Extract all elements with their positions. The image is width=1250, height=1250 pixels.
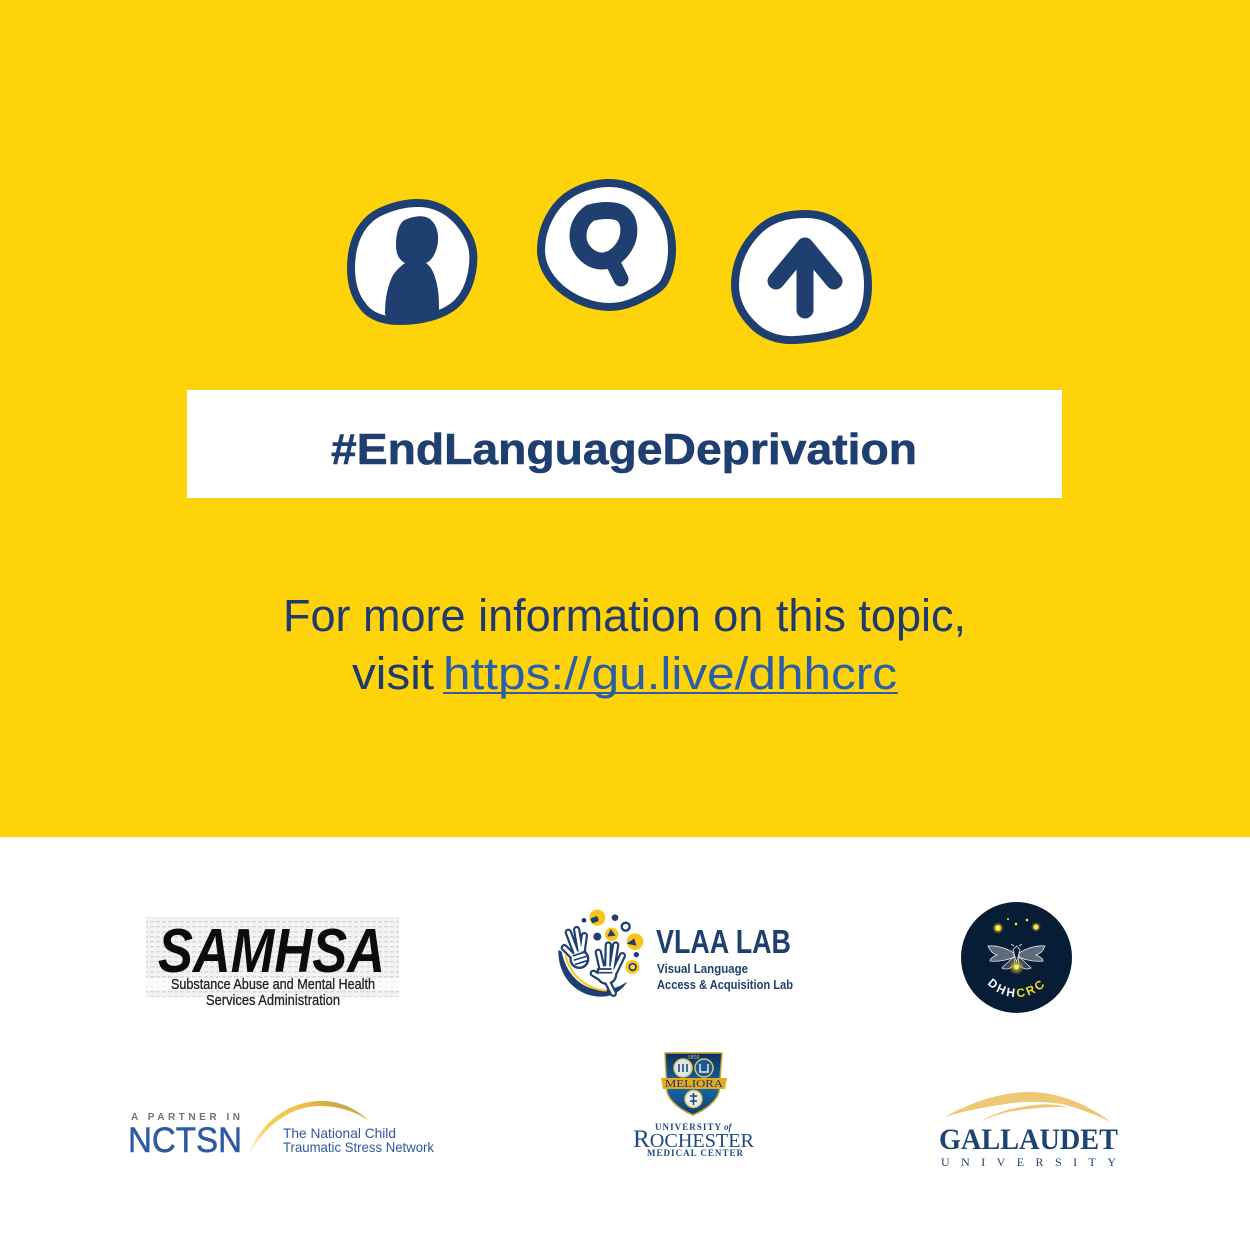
icon: gold arc [248, 1101, 369, 1157]
logo: NCTSN: Traumatic Stress Network [283, 1139, 435, 1155]
text block: more information: For more information on this topic, [283, 590, 966, 641]
logo: VLAA Lab: Visual Language [657, 962, 748, 976]
logo: VLAA Lab: VLAA LAB [656, 923, 791, 960]
logo: SAMHSA: Substance Abuse and Mental Health [171, 977, 375, 993]
logo: SAMHSA [146, 917, 399, 1009]
text block: more information: https://gu.live/dhhcrc [443, 648, 897, 699]
right hand [593, 945, 622, 993]
logo: DHHCRC firefly: DHHCRC [988, 978, 1044, 997]
icon: Rochester shield [661, 1053, 727, 1115]
icon: Rochester shield: 1850 [688, 1055, 700, 1061]
left hand [564, 930, 589, 969]
panel: yellow background [0, 0, 1250, 837]
logo: University of Rochester Medical Center: of [724, 1122, 732, 1132]
logo: University of Rochester Medical Center: ROCHESTER [633, 1126, 755, 1153]
icon: gold swooshes [945, 1092, 1111, 1122]
logo: NCTSN [128, 1101, 435, 1160]
icon: VLAA hands and shapes [558, 910, 643, 997]
logo: Gallaudet University: UNIVERSITY [941, 1155, 1116, 1169]
logo: SAMHSA: Services Administration [206, 993, 340, 1009]
icon: magnifying glass in circle [541, 183, 672, 307]
icon: firefly [988, 944, 1045, 975]
logo: NCTSN: The National Child [283, 1125, 396, 1141]
logo: University of Rochester Medical Center: UNIVERSITY [655, 1122, 722, 1132]
logo: VLAA Lab: Access & Acquisition Lab [657, 978, 793, 992]
text block: more information [283, 590, 966, 699]
logo: Gallaudet University: GALLAUDET [939, 1123, 1118, 1156]
banner: hashtag [187, 390, 1062, 498]
logo: DHHCRC firefly [961, 902, 1072, 1013]
logo: University of Rochester Medical Center: MEDICAL CENTER [647, 1148, 744, 1158]
icon: up arrow in circle [735, 214, 868, 340]
logo: NCTSN: A PARTNER IN [131, 1112, 240, 1123]
logo: VLAA Lab [558, 910, 793, 997]
text block: more information: visit [352, 648, 435, 699]
logo: SAMHSA: SAMHSA [158, 917, 385, 986]
panel: white logo area [0, 837, 1250, 1250]
icon: person in circle [351, 203, 473, 324]
icon: stars [992, 918, 1041, 934]
logo: Gallaudet University [939, 1092, 1118, 1169]
banner: hashtag: #EndLanguageDeprivation [331, 425, 917, 474]
icon: Rochester shield: MELIORA [665, 1079, 724, 1090]
logo: NCTSN: NCTSN [128, 1121, 242, 1160]
logo: University of Rochester Medical Center [633, 1053, 755, 1158]
